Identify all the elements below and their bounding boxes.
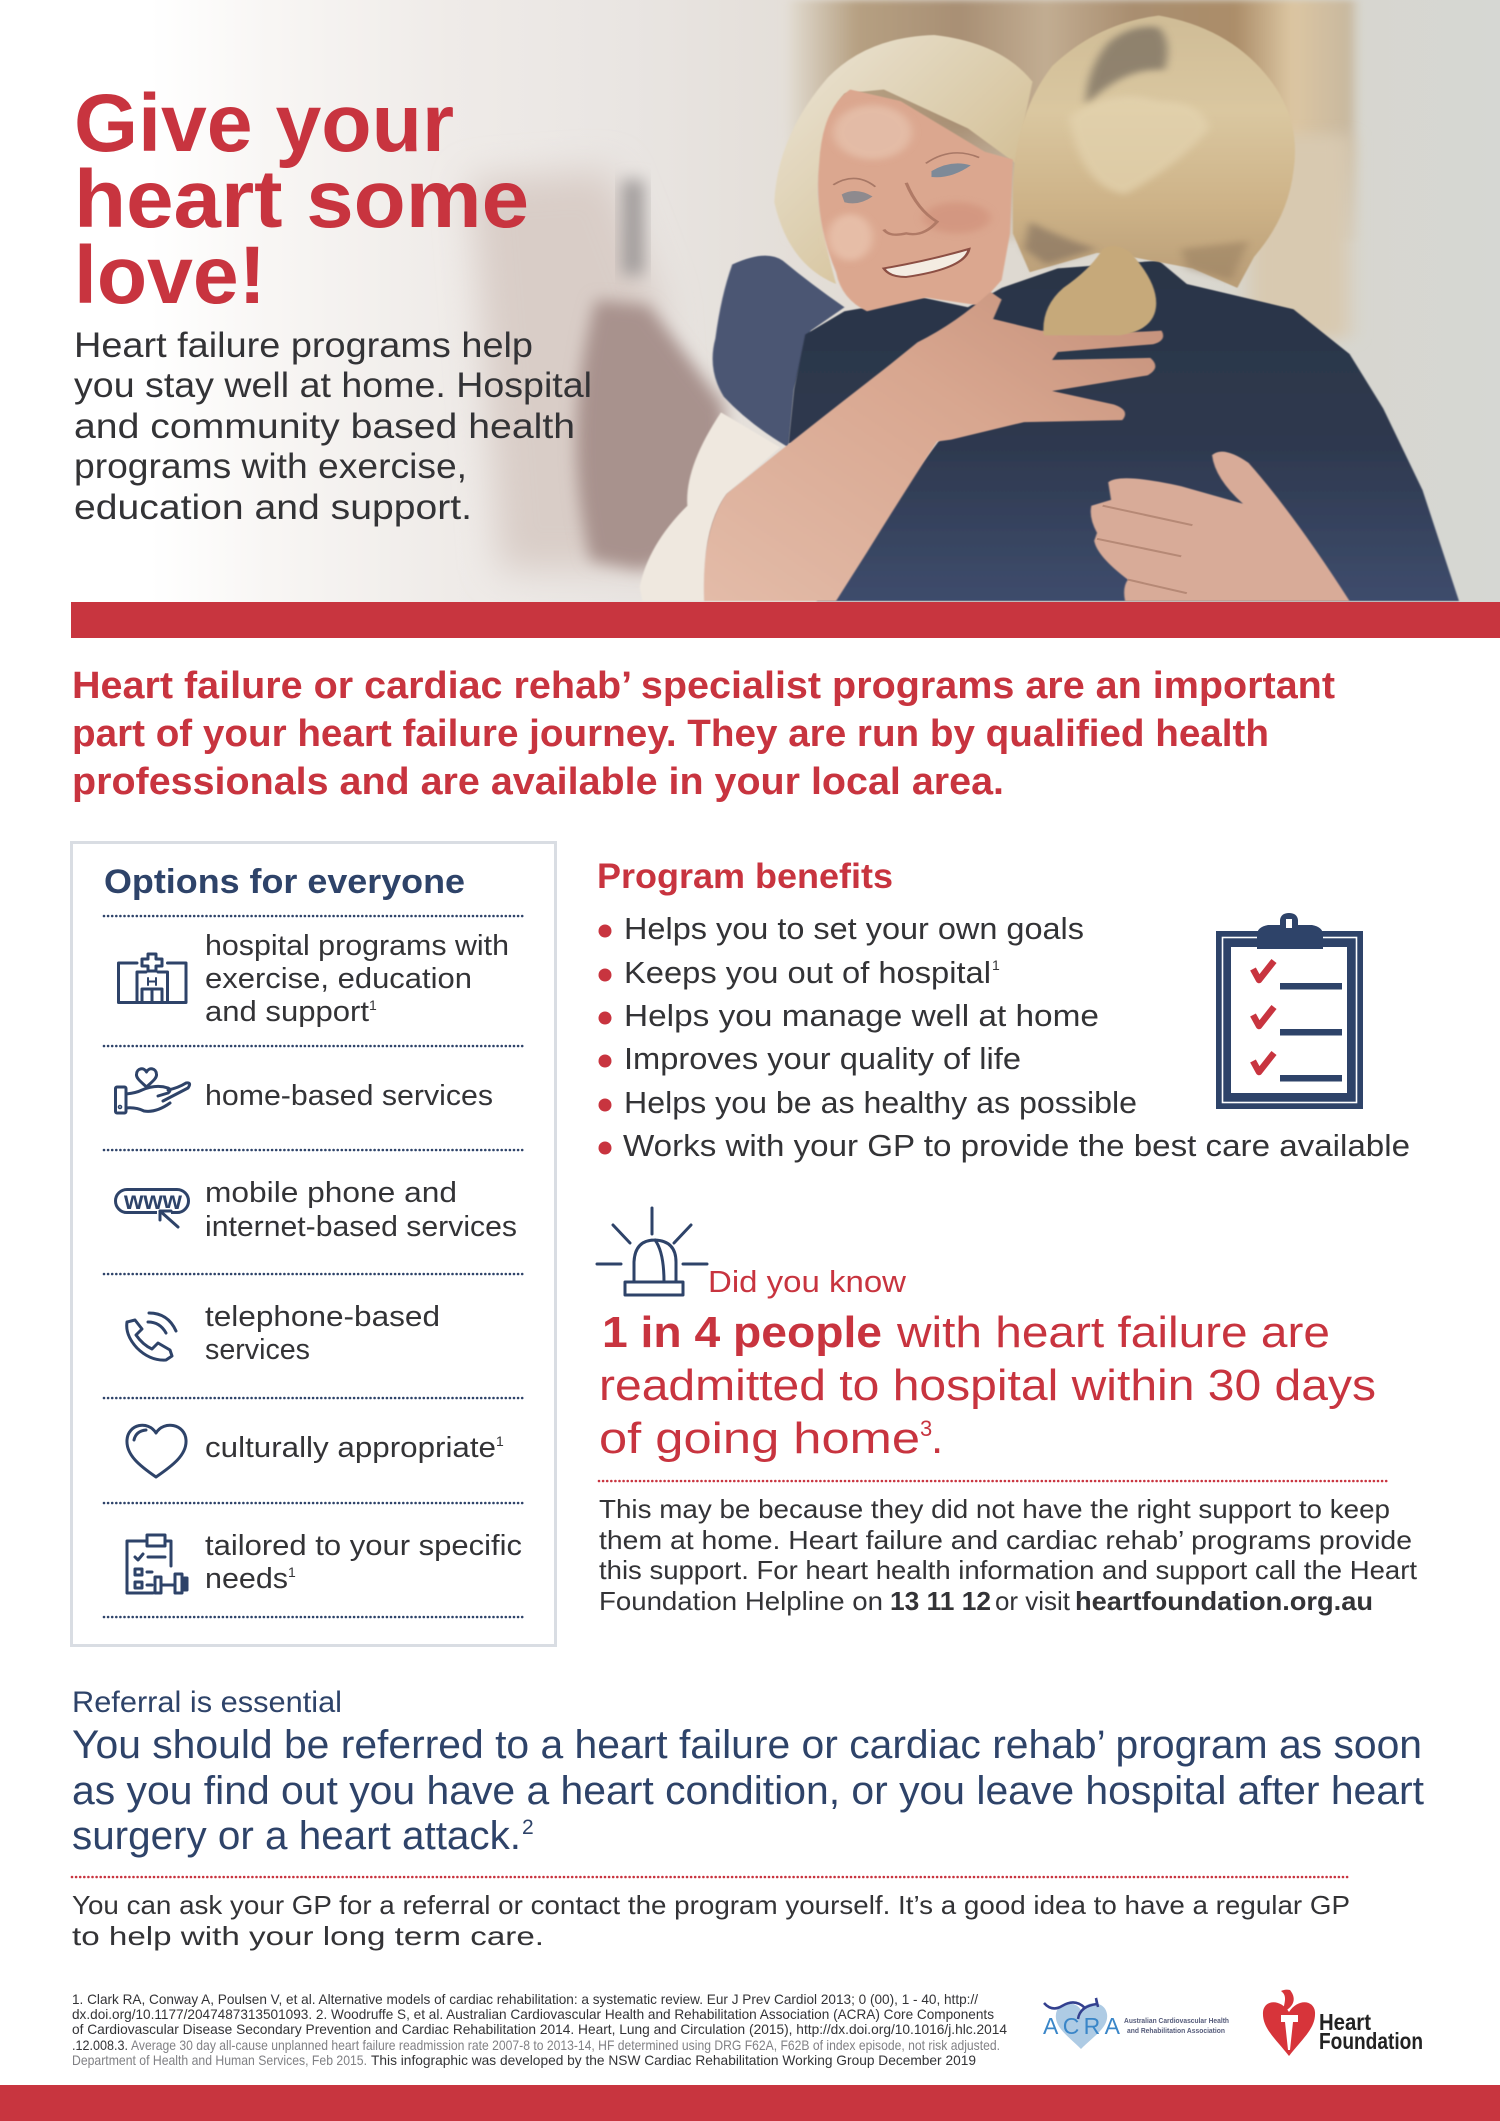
option text: telephone: telephone-based [205,1301,440,1333]
heading: options for everyone: Options for everyone [104,863,465,901]
icon: heart outline [127,1425,186,1477]
option text: hospital programs: and support [205,996,369,1028]
red statement: Heart failure or cardiac rehab’ specialist programs are an important [72,665,1335,707]
option text: mobile and internet: internet-based services [205,1211,517,1243]
list: program benefits: Helps you to set your own goals [624,911,1084,946]
support paragraph: Foundation Helpline on [599,1586,883,1616]
list: program benefits: Works with your GP to provide the best care available [623,1128,1410,1163]
statistic callout: 1 in 4 people [602,1308,882,1357]
GP advice text: to help with your long term care. [72,1921,544,1951]
GP advice text: You can ask your GP for a referral or contact the program yourself. It’s a good idea to have a regular GP [72,1890,1350,1920]
list: program benefits: Improves your quality of life [624,1041,1021,1076]
referral statement: surgery or a heart attack. [72,1814,521,1858]
logo: Heart Foundation: Foundation [1319,2028,1423,2054]
logo: ACRA: Australian Cardiovascular Health [1124,2016,1229,2025]
logo: ACRA: and Rehabilitation Association [1127,2026,1225,2035]
red statement: part of your heart failure journey. They are run by qualified health [72,713,1269,755]
referral statement: 2 [522,1816,534,1839]
referral heading: Referral is essential [72,1686,342,1719]
ponytail [1043,246,1156,335]
option text: hospital programs: 1 [369,997,377,1013]
back of head hair [1013,16,1295,288]
option text: mobile and internet: mobile phone and [205,1177,457,1209]
logo: Heart Foundation: Heart [1319,2009,1371,2035]
hero photo: two women hugging [238,0,1500,602]
statistic callout: of going home [599,1414,920,1463]
title: love! [74,230,266,321]
intro text: education and support. [74,488,472,527]
icon: www cursor: www [123,1185,183,1215]
heading: program benefits: Program benefits [597,857,893,896]
intro text: you stay well at home. Hospital [74,366,592,405]
option text: mobile and internet [205,1177,517,1243]
list: program benefits: Helps you be as healthy as possible [624,1085,1137,1120]
support paragraph: heartfoundation.org.au [1075,1586,1373,1616]
logo: ACRA: ACRA [1043,2013,1121,2039]
statistic callout: . [931,1414,943,1463]
icon: hospital [118,954,186,1002]
navy blouse [788,261,1459,601]
title: Give your [74,78,454,169]
red statement: professionals and are available in your local area. [72,761,1004,803]
referral statement: You should be referred to a heart failure or cardiac rehab’ program as soon [72,1723,1422,1767]
icon: alert siren [597,1208,707,1295]
intro text [74,326,592,527]
referral statement: as you find out you have a heart condition, or you leave hospital after heart [72,1769,1424,1813]
option text: tailored: needs [205,1563,288,1595]
footnotes: Average 30 day all-cause unplanned heart failure readmission rate 2007-8 to 2013-14, HF determined using DRG F62A, F62B of index episode, not risk adjusted. [131,2037,1000,2053]
support paragraph: 13 11 12 [890,1586,991,1616]
embracing arm and hand [704,292,1163,601]
cream sleeve [640,412,780,601]
option text: hospital programs [205,930,509,1028]
intro text: and community based health [74,407,575,446]
footnotes: 1. Clark RA, Conway A, Poulsen V, et al. Alternative models of cardiac rehabilitation: a systematic review. Eur J Prev Cardiol 2013; 0 (00), 1 - 40, http:// [72,1991,978,2007]
footnotes: This infographic was developed by the NSW Cardiac Rehabilitation Working Group December 2019 [371,2052,976,2068]
GP advice text [72,1890,1350,1951]
icon: www cursor [116,1185,188,1227]
option text: tailored: tailored to your specific [205,1530,522,1562]
referral statement [72,1723,1424,1858]
red banner bar [71,602,1500,638]
panel: options for everyone [72,842,556,1646]
bottom red band [0,2085,1500,2121]
icon: large checklist clipboard [1216,913,1363,1109]
list: program benefits [598,911,1410,1163]
option text: hospital programs: exercise, education [205,963,472,995]
support paragraph: this support. For heart health information and support call the Heart [599,1555,1418,1585]
statistic callout: with heart failure are [896,1308,1330,1357]
support paragraph: This may be because they did not have the right support to keep [599,1494,1390,1524]
option text: telephone [205,1301,440,1366]
intro text: Heart failure programs help [74,326,533,365]
footnotes: dx.doi.org/10.1177/2047487313501093. 2. Woodruffe S, et al. Australian Cardiovascular Health and Rehabilitation Association (ACRA) Core Components [72,2006,994,2022]
statistic callout [599,1308,1376,1463]
red statement [72,665,1335,803]
list: program benefits: Keeps you out of hospital [624,955,991,990]
support paragraph: them at home. Heart failure and cardiac rehab’ programs provide [599,1525,1412,1555]
did you know label: Did you know [708,1264,907,1299]
far sleeve [713,256,844,447]
statistic callout: 3 [920,1416,932,1441]
old woman's hair [774,35,1032,284]
intro text: programs with exercise, [74,447,467,486]
icon: hand holding heart [116,1069,190,1113]
option text: tailored [205,1530,522,1595]
option text: hospital programs: hospital programs with [205,930,509,962]
footnotes: .12.008.3. [72,2037,128,2053]
title: heart some [74,154,529,245]
list: program benefits: 1 [992,957,1000,973]
option text: telephone: services [205,1334,310,1366]
lower hand [1091,452,1350,601]
old woman's face [818,89,1013,311]
statistic callout: readmitted to hospital within 30 days [599,1361,1376,1410]
title [74,78,529,321]
support paragraph [599,1494,1418,1616]
icon: clipboard and dumbbell [127,1535,187,1593]
footnotes: Department of Health and Human Services, Feb 2015. [72,2052,367,2068]
footnotes [72,1991,1007,2068]
option text: culturally appropriate: culturally appropriate [205,1432,496,1464]
logo: Heart Foundation [1263,1990,1423,2056]
icon: telephone [127,1313,176,1360]
option text: home-based services: home-based services [205,1080,493,1112]
list: program benefits: Helps you manage well at home [624,998,1099,1033]
footnotes: of Cardiovascular Disease Secondary Prevention and Cardiac Rehabilitation 2014. Heart, Lung and Circulation (2015), http://dx.doi.org/10.1016/j.hlc.2014 [72,2021,1007,2037]
option text: tailored: 1 [288,1564,296,1580]
support paragraph: or visit [995,1586,1071,1616]
option text: culturally appropriate: 1 [496,1433,504,1449]
logo: ACRA [1043,1998,1229,2049]
